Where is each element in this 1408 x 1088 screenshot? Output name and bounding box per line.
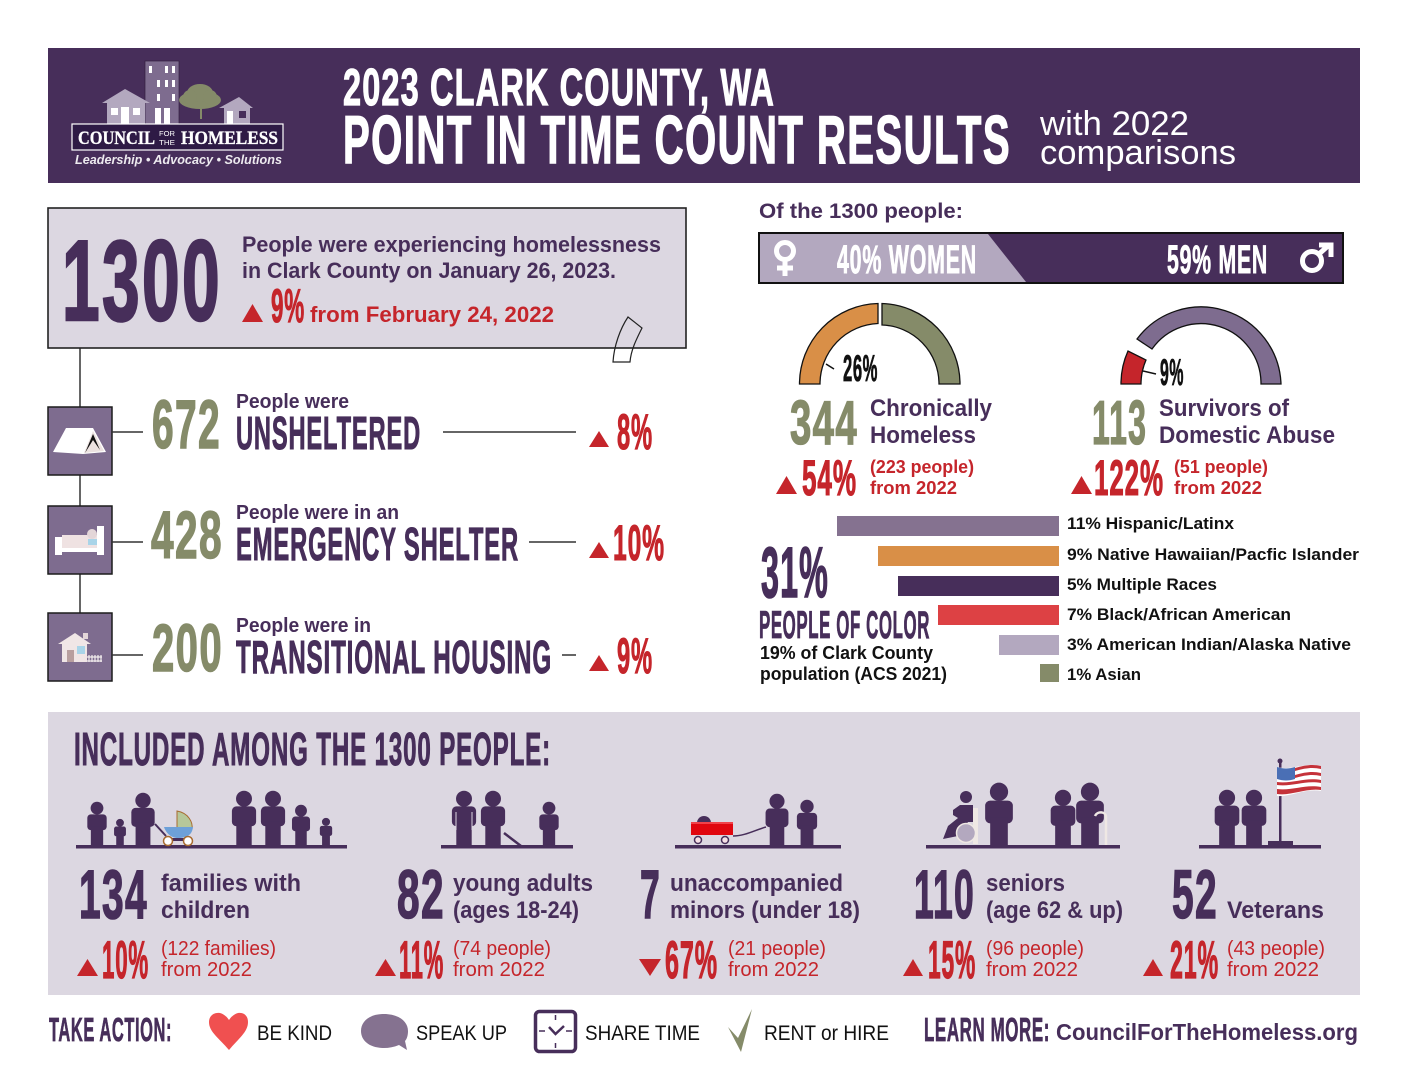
infographic canvas: 9% <box>617 628 653 684</box>
connector line <box>79 348 81 614</box>
stat: survivors of domestic abuse: Survivors of <box>1159 395 1290 422</box>
footer: take action: SHARE TIME <box>585 1022 700 1045</box>
stat: chronically homeless: Chronically <box>870 395 993 422</box>
gender split bar: 40% WOMEN <box>837 238 977 282</box>
stat: families <box>77 856 301 990</box>
pictogram: veterans <box>1199 758 1321 848</box>
footer: take action: SPEAK UP <box>416 1022 507 1045</box>
panel: 1300 people total: in Clark County on January 26, 2023. <box>242 258 616 283</box>
stat: chronically homeless <box>776 389 993 506</box>
gender split bar: 59% MEN <box>1167 238 1268 282</box>
stat: people of color <box>759 534 947 684</box>
stat: seniors: seniors <box>986 870 1065 897</box>
icon: clock <box>536 1012 576 1052</box>
infographic canvas: 8% <box>617 404 653 460</box>
stat: survivors of domestic abuse: Domestic Abuse <box>1159 422 1335 449</box>
row: unsheltered <box>48 386 653 475</box>
logo: Council for the Homeless: COUNCIL <box>78 129 155 149</box>
stat: veterans: 21% <box>1170 931 1219 990</box>
icon: heart <box>209 1013 248 1050</box>
panel: 1300 people total <box>48 208 686 362</box>
stat: chronically homeless: (223 people) <box>870 457 974 477</box>
stat: seniors: 110 <box>914 856 975 933</box>
panel: 1300 people total: People were experiencing homelessness <box>242 232 661 257</box>
row: unsheltered: 672 <box>152 386 221 463</box>
row: transitional housing: TRANSITIONAL HOUSING <box>236 631 552 683</box>
icon: stroller <box>155 811 193 846</box>
icon: house <box>48 613 143 681</box>
icon: bed <box>48 506 143 574</box>
stat: seniors: from 2022 <box>986 959 1078 981</box>
bar chart: race and ethnicity: 3% American Indian/Alaska Native <box>1067 635 1351 654</box>
logo: Council for the Homeless: THE <box>159 138 175 147</box>
icon: female <box>776 242 794 276</box>
row: unsheltered: UNSHELTERED <box>236 407 421 459</box>
chart: domestic abuse gauge: 9% <box>1160 352 1184 393</box>
stat: survivors of domestic abuse: 113 <box>1092 389 1147 458</box>
footer: take action <box>49 1009 1358 1052</box>
row: emergency shelter <box>48 498 665 574</box>
logo: Council for the Homeless <box>72 61 283 167</box>
stat: survivors of domestic abuse: 122% <box>1094 450 1164 506</box>
stat: seniors: (96 people) <box>986 938 1084 960</box>
change: up 9 percent <box>589 628 653 684</box>
learn more link: CouncilForTheHomeless.org <box>1056 1019 1358 1045</box>
stat: families: children <box>161 897 250 924</box>
stat: families: 10% <box>102 931 149 990</box>
footer: take action: BE KIND <box>257 1022 332 1045</box>
subtitle <box>1039 105 1236 172</box>
bar chart: race and ethnicity: 1% Asian <box>1067 665 1141 684</box>
pictogram: unaccompanied minors <box>675 794 841 848</box>
stat: unaccompanied minors: from 2022 <box>728 959 819 981</box>
stat: veterans: (43 people) <box>1227 938 1325 960</box>
stat: unaccompanied minors: minors (under 18) <box>670 897 860 924</box>
stat: young adults <box>375 856 593 990</box>
stat: seniors: (age 62 & up) <box>986 897 1123 924</box>
chart: chronically homeless gauge: 26% <box>843 348 878 389</box>
panel: included among the 1300 people <box>48 712 1360 995</box>
stat: seniors: 15% <box>928 931 976 990</box>
stat: chronically homeless: from 2022 <box>870 478 957 498</box>
stat: unaccompanied minors: 7 <box>640 856 661 933</box>
row: transitional housing: 200 <box>152 611 223 686</box>
wedge mark <box>613 317 642 362</box>
title: 2023 CLARK COUNTY, WA <box>343 59 775 117</box>
subtitle: with 2022 <box>1039 105 1189 143</box>
stat: unaccompanied minors: 67% <box>665 931 718 990</box>
stat: chronically homeless: 54% <box>802 450 857 506</box>
icon: check mark <box>728 1009 752 1052</box>
row: transitional housing: People were in <box>236 615 371 637</box>
stat: unaccompanied minors: unaccompanied <box>670 870 843 897</box>
stat: veterans <box>1143 856 1325 990</box>
change: up 9 percent: 9% <box>271 279 305 332</box>
stat: unaccompanied minors <box>639 856 860 990</box>
stat: people of color: population (ACS 2021) <box>760 664 947 684</box>
stat: veterans: Veterans <box>1227 897 1324 924</box>
stat: young adults: (74 people) <box>453 938 551 960</box>
stat: unaccompanied minors: (21 people) <box>728 938 826 960</box>
stat: seniors <box>903 856 1123 990</box>
stat: families: (122 families) <box>161 938 276 960</box>
icon: red wagon <box>691 816 766 844</box>
header banner <box>48 48 1360 183</box>
logo: Council for the Homeless: Leadership • Advocacy • Solutions <box>75 153 282 167</box>
change: up 9 percent: from February 24, 2022 <box>310 302 554 327</box>
row: emergency shelter: People were in an <box>236 502 399 524</box>
learn more link <box>924 1012 1358 1049</box>
stat: young adults: 11% <box>399 931 444 990</box>
pictogram: seniors <box>926 783 1120 848</box>
infographic canvas: 10% <box>613 515 665 571</box>
stat: people of color: 19% of Clark County <box>760 643 933 663</box>
stat: families: from 2022 <box>161 959 252 981</box>
icon: tent <box>48 407 143 475</box>
stat: survivors of domestic abuse <box>1071 389 1335 506</box>
stat: survivors of domestic abuse: (51 people) <box>1174 457 1268 477</box>
row: unsheltered: People were <box>236 391 349 413</box>
bar chart: race and ethnicity: 9% Native Hawaiian/Pacfic Islander <box>1067 545 1359 564</box>
learn more link: LEARN MORE: <box>924 1012 1050 1049</box>
title <box>343 59 1011 178</box>
footer: take action: RENT or HIRE <box>764 1022 889 1045</box>
stat: young adults: from 2022 <box>453 959 545 981</box>
stat: survivors of domestic abuse: from 2022 <box>1174 478 1262 498</box>
stat: families: families with <box>161 870 301 897</box>
bar chart: race and ethnicity <box>837 514 1359 684</box>
gender split bar <box>759 233 1343 283</box>
logo: Council for the Homeless: HOMELESS <box>181 129 278 149</box>
subtitle: comparisons <box>1040 134 1236 172</box>
pictogram: young adults <box>441 791 573 848</box>
stat: chronically homeless: Homeless <box>870 422 976 449</box>
bar chart: race and ethnicity: 11% Hispanic/Latinx <box>1067 514 1235 533</box>
bar chart: race and ethnicity: 7% Black/African American <box>1067 605 1291 624</box>
row: emergency shelter: 428 <box>151 498 223 573</box>
logo: Council for the Homeless: FOR <box>159 129 176 138</box>
change: up 8 percent <box>589 404 653 460</box>
icon: male <box>1302 245 1331 270</box>
chart: chronically homeless gauge <box>799 304 960 389</box>
heading: INCLUDED AMONG THE 1300 PEOPLE: <box>74 723 551 775</box>
stat: young adults: (ages 18-24) <box>453 897 579 924</box>
stat: young adults: 82 <box>397 856 445 933</box>
row: transitional housing <box>48 611 653 686</box>
bar chart: race and ethnicity: 5% Multiple Races <box>1067 575 1217 594</box>
icon: wheelchair user <box>943 791 978 844</box>
panel: 1300 people total: 1300 <box>62 218 222 345</box>
stat: chronically homeless: 344 <box>790 389 858 458</box>
footer: take action: TAKE ACTION: <box>49 1012 172 1049</box>
heading: of the 1300 people: Of the 1300 people: <box>759 200 963 223</box>
stat: veterans: from 2022 <box>1227 959 1319 981</box>
chart: domestic abuse gauge <box>1121 307 1281 393</box>
change: up 9 percent <box>242 279 554 332</box>
pictogram: families <box>76 791 347 848</box>
icon: speech bubble <box>361 1014 408 1050</box>
stat: families: 134 <box>79 856 148 933</box>
stat: veterans: 52 <box>1172 856 1218 933</box>
stat: young adults: young adults <box>453 870 593 897</box>
change: up 10 percent <box>589 515 665 571</box>
icon: American flag <box>1277 765 1321 796</box>
stat: people of color: 31% <box>761 534 829 613</box>
row: emergency shelter: EMERGENCY SHELTER <box>236 518 519 570</box>
infographic canvas: PEOPLE OF COLOR <box>759 604 930 647</box>
